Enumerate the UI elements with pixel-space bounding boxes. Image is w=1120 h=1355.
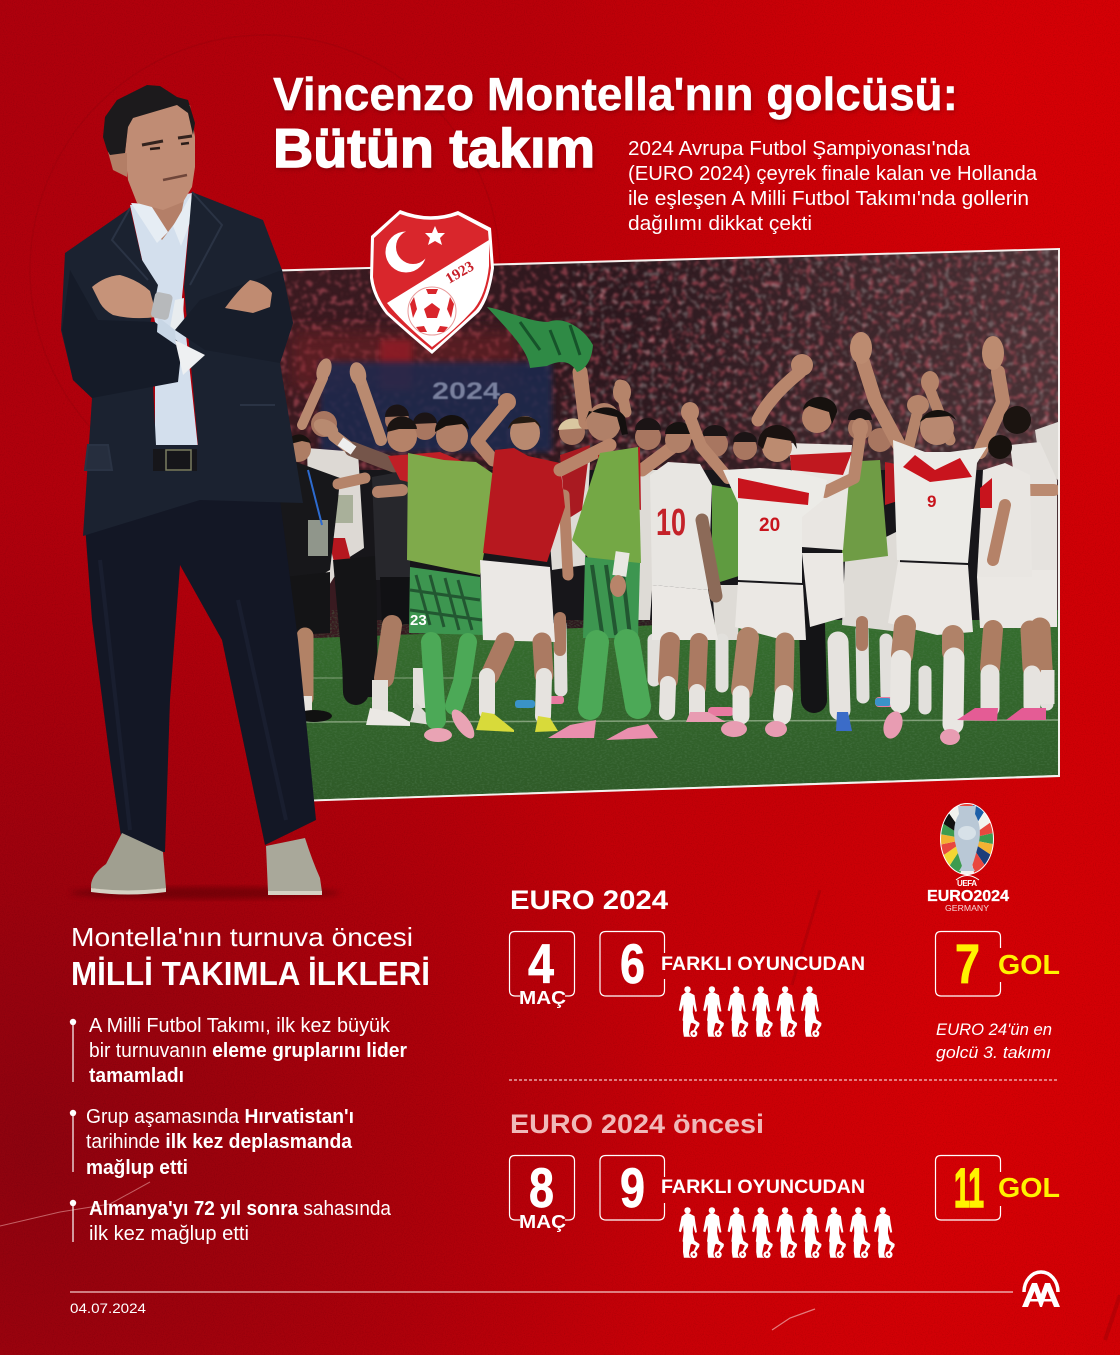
stat: players — [600, 932, 865, 996]
trousers — [85, 450, 316, 852]
stat: goals: 11 — [954, 1156, 984, 1219]
EURO 2024 logo: EURO2024 — [927, 888, 1009, 905]
player icons — [679, 986, 822, 1037]
item 2: mağlup etti — [86, 1157, 188, 1179]
coach figure — [61, 85, 340, 899]
item 3: Almanya'yı 72 yıl sonra sahasında — [89, 1198, 392, 1220]
item 1: tamamladı — [89, 1065, 184, 1087]
stat: players: FARKLI OYUNCUDAN — [661, 954, 865, 975]
staff member in black — [276, 434, 365, 722]
stat: matches: MAÇ — [519, 1211, 566, 1232]
note — [936, 1020, 1052, 1062]
wristwatch — [150, 291, 173, 321]
stat: matches — [510, 1156, 574, 1232]
goalkeeper number 23 — [314, 415, 492, 742]
note: EURO 24'ün en — [936, 1020, 1052, 1039]
stat: goals — [936, 932, 1060, 996]
player in red shirt — [476, 393, 568, 732]
stat: goals: 7 — [955, 932, 980, 995]
centre player raising arm — [758, 354, 852, 731]
right hand — [225, 280, 272, 313]
title — [273, 68, 958, 179]
heading: EURO 2024 öncesi — [510, 1109, 764, 1139]
staff member in white — [302, 356, 381, 697]
heading: MİLLİ TAKIMLA İLKLERİ — [71, 955, 430, 992]
item 1: bir turnuvanın eleme gruplarını lider — [89, 1040, 407, 1062]
panel: before EURO 2024 stats — [510, 1109, 1060, 1258]
neck and shirt — [130, 185, 198, 448]
back row of players — [340, 371, 1058, 716]
title: Vincenzo Montella'nın golcüsü: — [273, 68, 958, 120]
player in black training shirt — [366, 416, 432, 726]
date: 04.07.2024 — [70, 1300, 146, 1316]
badge: Turkish Football Federation: 1923 — [443, 259, 477, 287]
arms — [62, 270, 182, 398]
stat: players: FARKLI OYUNCUDAN — [661, 1177, 865, 1198]
player number 10 from behind: 10 — [656, 502, 686, 544]
left hand — [92, 275, 157, 318]
back legs — [342, 612, 1054, 714]
stat: matches: 4 — [528, 932, 554, 995]
intro text — [628, 138, 1038, 235]
item 2: Grup aşamasında Hırvatistan'ı — [86, 1106, 354, 1128]
back row bodies — [545, 422, 1058, 640]
item 1 — [70, 1015, 407, 1087]
item 2: tarihinde ilk kez deplasmanda — [86, 1131, 353, 1153]
stat: matches: 8 — [529, 1156, 554, 1219]
item 3 — [70, 1198, 392, 1245]
stat: matches: MAÇ — [519, 987, 566, 1008]
player number 9 — [850, 332, 1004, 745]
pitch — [262, 610, 1062, 805]
shoes — [91, 833, 322, 895]
panel: Montella firsts — [70, 922, 430, 1245]
heading: EURO 2024 — [510, 885, 668, 915]
raised arm with green shirt — [487, 307, 593, 422]
panel: EURO 2024 stats — [510, 885, 1060, 1062]
jacket — [61, 192, 303, 536]
badge: Turkish Football Federation — [370, 210, 494, 354]
head — [103, 85, 195, 210]
stat: goals — [936, 1156, 1060, 1220]
stat: players — [600, 1156, 865, 1220]
intro text: dağılımı dikkat çekti — [628, 213, 812, 235]
team photo — [258, 248, 1062, 805]
item 2 — [70, 1106, 354, 1179]
goalkeeper number 23: 23 — [410, 612, 427, 629]
icon: AA logo — [1022, 1272, 1060, 1307]
stat: goals: GOL — [998, 949, 1060, 980]
shadow — [70, 887, 340, 899]
title: Bütün takım — [273, 117, 595, 179]
players on the right from behind — [957, 406, 1057, 721]
player number 9: 9 — [927, 492, 936, 511]
belt — [153, 449, 197, 471]
heading: Montella'nın turnuva öncesi — [71, 922, 413, 952]
EURO 2024 logo — [927, 803, 1009, 913]
note: golcü 3. takımı — [936, 1043, 1051, 1062]
item 1: A Milli Futbol Takımı, ilk kez büyük — [89, 1015, 391, 1037]
intro text: (EURO 2024) çeyrek finale kalan ve Hollanda — [628, 163, 1038, 185]
stat: matches — [510, 932, 574, 1008]
player number 20: 20 — [759, 515, 780, 536]
stat: players: 9 — [620, 1156, 645, 1219]
item 3: ilk kez mağlup etti — [89, 1223, 249, 1245]
player number 20 — [681, 402, 868, 737]
intro text: ile eşleşen A Milli Futbol Takımı'nda gollerin — [628, 188, 1029, 210]
crowd — [260, 248, 1060, 648]
intro text: 2024 Avrupa Futbol Şampiyonası'nda — [628, 138, 971, 160]
jacket details — [85, 192, 275, 470]
player number 10 from behind — [650, 422, 726, 722]
player icons — [679, 1207, 895, 1258]
banner — [320, 362, 552, 452]
banner: 2024 — [432, 378, 501, 405]
stat: players: 6 — [620, 932, 645, 995]
stat: goals: GOL — [998, 1172, 1060, 1203]
heading — [71, 922, 430, 992]
EURO 2024 logo: UEFA — [957, 879, 977, 888]
EURO 2024 logo: GERMANY — [945, 903, 989, 913]
goalkeeper in green bib — [548, 403, 695, 740]
